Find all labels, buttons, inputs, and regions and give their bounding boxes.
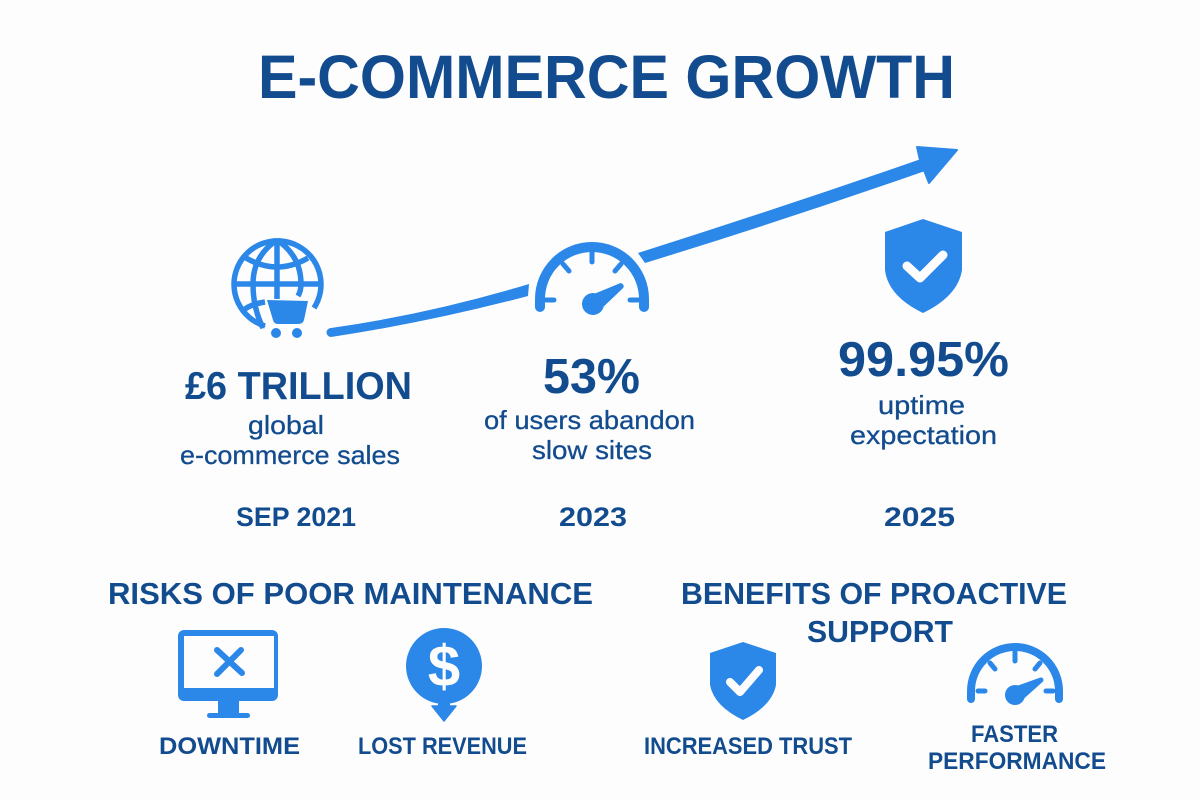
icon: monitor with x	[178, 630, 278, 718]
heading: benefits: SUPPORT	[807, 614, 953, 649]
label: faster performance	[928, 721, 1106, 775]
stat: 99.95 percent	[838, 333, 1009, 450]
stat: 53 percent: 53%	[543, 350, 640, 404]
stat: 99.95 percent: 99.95%	[838, 333, 1009, 387]
heading: benefits: BENEFITS OF PROACTIVE	[681, 576, 1067, 611]
label: faster performance: PERFORMANCE	[928, 748, 1106, 775]
stat: 99.95 percent: expectation	[850, 420, 997, 450]
timeline labels: 2023	[559, 502, 627, 532]
icon: falling dollar	[406, 628, 482, 721]
timeline labels: SEP 2021	[236, 502, 356, 532]
stat: 53 percent: slow sites	[532, 435, 652, 465]
icon: shield with check	[885, 219, 962, 313]
icon: small shield with check	[710, 642, 776, 720]
label: lost revenue: LOST REVENUE	[358, 733, 527, 760]
timeline labels	[236, 502, 955, 532]
title: E-COMMERCE GROWTH	[258, 43, 955, 111]
stat: 53 percent	[484, 350, 695, 465]
timeline labels: 2025	[884, 502, 955, 532]
stat: 6 trillion: global	[248, 410, 324, 440]
growth arrow	[326, 147, 957, 337]
label: faster performance: FASTER	[971, 721, 1058, 748]
icon: small speedometer	[971, 647, 1059, 705]
label: downtime: DOWNTIME	[159, 733, 300, 760]
stat: 6 trillion: £6 TRILLION	[185, 365, 412, 408]
stat: 53 percent: of users abandon	[484, 405, 695, 435]
icon: globe with shopping cart	[234, 240, 321, 338]
stat: 6 trillion	[180, 365, 412, 470]
heading: risks: RISKS OF POOR MAINTENANCE	[108, 576, 593, 611]
stat: 99.95 percent: uptime	[878, 390, 965, 420]
icon: speedometer	[540, 247, 644, 315]
icon: falling dollar: $	[428, 634, 460, 699]
heading: benefits	[681, 576, 1067, 649]
stat: 6 trillion: e-commerce sales	[180, 440, 400, 470]
label: increased trust: INCREASED TRUST	[644, 733, 852, 760]
